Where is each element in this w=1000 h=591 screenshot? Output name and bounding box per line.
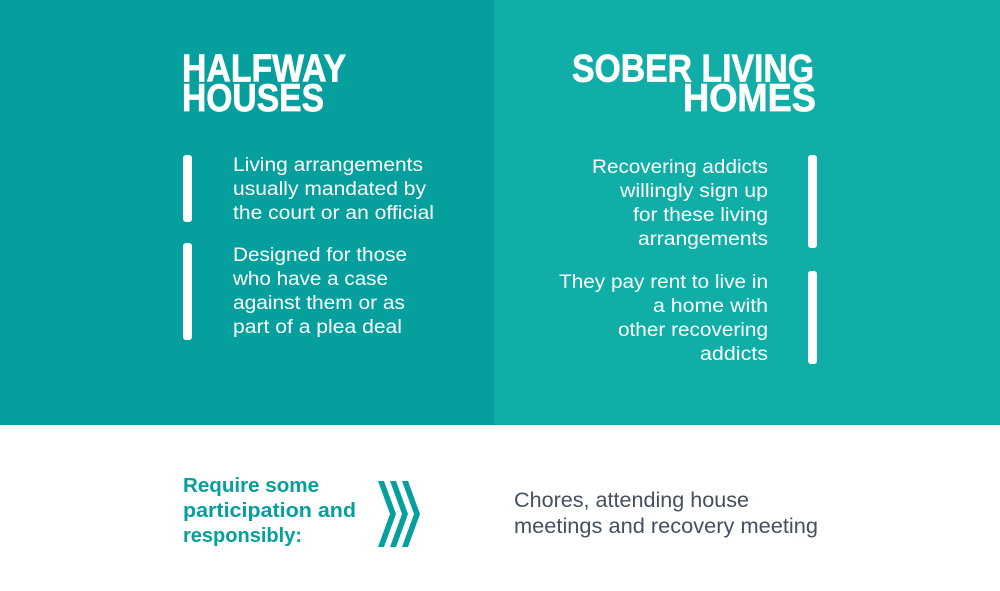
text block: designed for: who have a case	[232, 268, 388, 290]
text block: pay rent	[559, 271, 768, 365]
bullet bar 1	[183, 155, 192, 222]
text block: require some participation	[183, 475, 356, 547]
heading: halfway houses: HALFWAY	[182, 48, 346, 90]
text block: willingly sign up: willingly sign up	[619, 180, 768, 202]
text block: require some participation: Require some	[183, 475, 319, 497]
bullet bar 4	[808, 271, 817, 364]
heading: sober living homes: SOBER LIVING	[572, 48, 814, 90]
text block: pay rent: a home with	[653, 295, 768, 317]
text block: mandated	[233, 154, 434, 224]
text block: require some participation: participation and	[183, 500, 356, 522]
text block: pay rent: other recovering	[618, 319, 768, 341]
heading: halfway houses	[182, 48, 346, 120]
heading: sober living homes	[572, 48, 816, 120]
panel: halfway houses	[0, 0, 494, 425]
text block: willingly sign up: arrangements	[638, 228, 768, 250]
text block: pay rent: They pay rent to live in	[559, 271, 768, 293]
text block: mandated: Living arrangements	[233, 154, 423, 176]
heading: sober living homes: HOMES	[683, 77, 816, 120]
text block: require some participation: responsibly:	[183, 525, 302, 547]
text block: chores: meetings and recovery meeting	[514, 515, 818, 538]
heading: halfway houses: HOUSES	[182, 77, 324, 120]
text block: designed for: against them or as	[233, 292, 405, 314]
text block: willingly sign up: Recovering addicts	[592, 156, 768, 178]
icon: triple chevron arrow	[378, 481, 420, 547]
bullet bar 3	[808, 155, 817, 248]
text block: mandated: usually mandated by	[233, 178, 426, 200]
text block: chores: Chores, attending house	[514, 489, 749, 512]
text block: willingly sign up: for these living	[633, 204, 768, 226]
text block: pay rent: addicts	[700, 343, 768, 365]
bullet bar 2	[183, 243, 192, 340]
panel: sober living homes	[494, 0, 1000, 425]
text block: chores	[514, 489, 818, 538]
text block: designed for: part of a plea deal	[233, 316, 402, 338]
text block: designed for	[232, 244, 407, 338]
text block: mandated: the court or an official	[233, 202, 434, 224]
text block: willingly sign up	[592, 156, 768, 250]
text block: designed for: Designed for those	[233, 244, 407, 266]
